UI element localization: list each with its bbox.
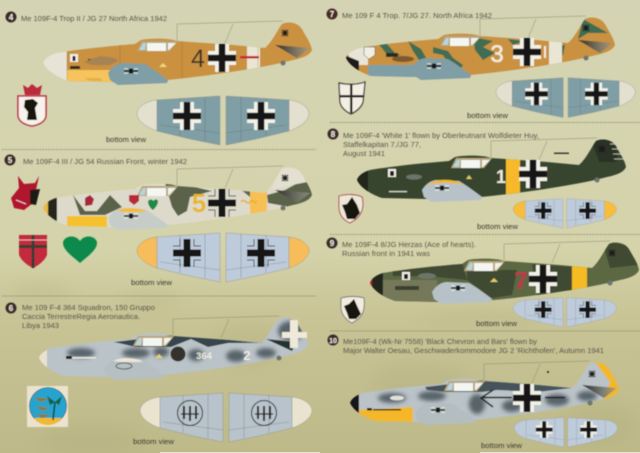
caption 9 <box>342 240 476 258</box>
badge 10: 10 <box>329 338 337 345</box>
badge 4: 4 <box>9 13 14 22</box>
aircraft profile 6 <box>32 316 308 380</box>
emblem: black dog white shield <box>341 296 364 323</box>
badge 9 <box>326 238 338 248</box>
label: bottom view 10: bottom view <box>481 441 523 450</box>
aircraft profile 4: 4 <box>191 45 205 73</box>
caption 7: Me 109 F 4 Trop. 7/JG 27. North Africa 1942 <box>342 11 492 20</box>
badge 5: 5 <box>8 156 13 165</box>
aircraft profile 9 <box>363 240 639 304</box>
emblem: red devil head <box>11 176 40 210</box>
aircraft profile 4 <box>36 21 312 85</box>
panel: aircraft 5 <box>4 154 312 287</box>
caption 4: Me 109F-4 Trop II / JG 27 North Africa 1942 <box>21 14 167 23</box>
badge 4 <box>6 12 16 22</box>
badge 8 <box>328 128 338 140</box>
badge 6 <box>6 302 16 314</box>
bottom view wings 7 <box>496 78 635 117</box>
aircraft profile 7: 3 <box>490 41 504 68</box>
aircraft profile 6: 2 <box>243 348 251 363</box>
panel: aircraft 7 <box>326 8 635 120</box>
caption 10: Major Walter Oesau, Geschwaderkommodore JG 2 'Richthofen', Autumn 1941 <box>343 346 604 355</box>
aircraft profile 6: 364 <box>196 351 213 362</box>
caption 9: Russian front in 1941 was <box>342 249 430 258</box>
caption 6: Caccia TerrestreRegia Aeronautica. <box>22 312 140 321</box>
label: bottom view 6: bottom view <box>133 437 175 446</box>
badge 8: 8 <box>331 130 336 139</box>
emblem: black dog shield <box>339 195 363 223</box>
emblem: green heart <box>63 237 97 263</box>
emblem: red bear shield <box>18 84 46 126</box>
label: bottom view 9: bottom view <box>476 319 518 328</box>
bottom view wings 10 <box>514 418 617 447</box>
label: bottom view 8: bottom view <box>477 222 519 231</box>
caption 8 <box>343 131 539 158</box>
label: bottom view 5: bottom view <box>131 278 173 287</box>
caption 9: Me 109F-4 8/JG Herzas (Ace of hearts). <box>342 240 476 249</box>
bottom view wings 5 <box>137 233 309 282</box>
aircraft profile 8 <box>350 138 626 202</box>
badge 9: 9 <box>330 239 335 248</box>
badge 10 <box>328 334 338 346</box>
caption 5: Me 109F-4 III / JG 54 Russian Front, winter 1942 <box>23 157 187 166</box>
aircraft profile 10 <box>343 358 622 426</box>
panel: aircraft 9 <box>326 238 639 328</box>
bottom view wings 4 <box>137 96 309 145</box>
panel: aircraft 6 <box>6 302 312 446</box>
caption 10 <box>343 337 604 355</box>
badge 7: 7 <box>330 10 335 19</box>
bottom view wings 9 <box>513 298 616 327</box>
badge 5 <box>4 154 16 166</box>
panel: aircraft 8 <box>328 128 626 231</box>
caption 8: Me 109F-4 'White 1' flown by Oberleutnant Wolfdieter Huy, <box>343 131 539 140</box>
aircraft profile 8: 1 <box>496 167 506 187</box>
caption 6: Me 109 F-4 364 Squadron, 150 Gruppo <box>22 303 155 312</box>
caption 10: Me109F-4 (Wk-Nr 7558) 'Black Chevron and Bars' flown by <box>343 337 537 346</box>
caption 8: Staffelkapitan 7./JG 77, <box>343 140 421 149</box>
caption 8: August 1941 <box>343 149 385 158</box>
emblem: white cross shield <box>339 82 365 114</box>
section dividers <box>2 122 640 331</box>
emblem: red cross shield <box>19 235 47 268</box>
aircraft profile 5: 5 <box>192 188 206 218</box>
panel: aircraft 10 <box>328 334 622 450</box>
label: bottom view 7: bottom view <box>467 111 509 120</box>
badge 7 <box>326 8 338 20</box>
aircraft profile 9: 7 <box>514 268 528 295</box>
emblem: squadron badge <box>27 386 68 427</box>
aircraft profile 5 <box>36 165 312 230</box>
caption 6: Libya 1943 <box>22 321 59 330</box>
aircraft profile 7 <box>339 16 615 80</box>
panel: aircraft 4 <box>6 12 312 145</box>
bottom view wings 8 <box>513 199 616 228</box>
badge 6: 6 <box>9 304 14 313</box>
bottom view wings 6 <box>140 393 312 442</box>
label: bottom view 4: bottom view <box>106 135 146 144</box>
caption 6 <box>22 303 155 330</box>
